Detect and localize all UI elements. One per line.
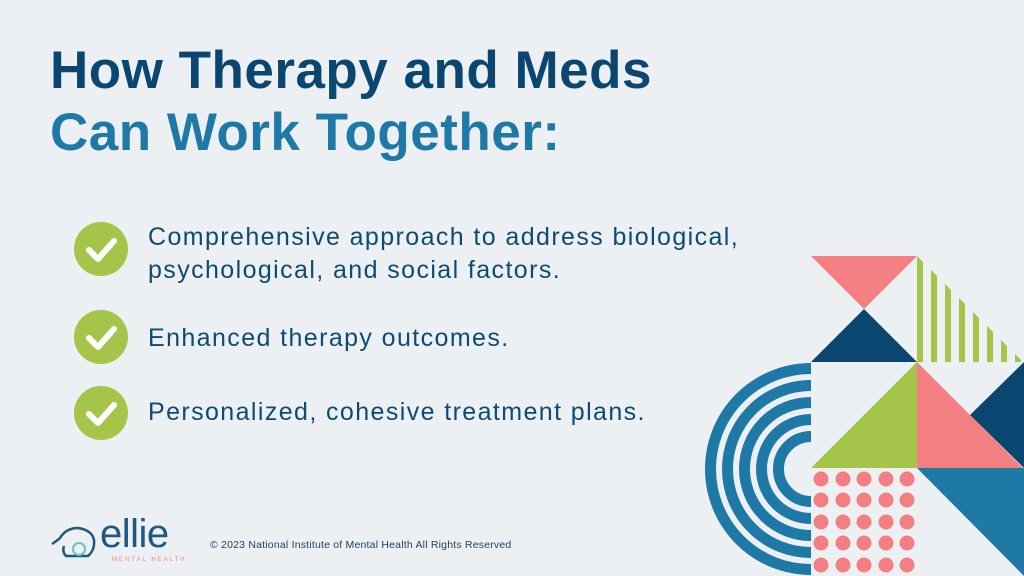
icon: elephant xyxy=(51,526,96,558)
title: How Therapy and Meds xyxy=(50,41,652,100)
item 3 xyxy=(74,386,646,440)
icon: check xyxy=(74,222,128,276)
item 2 xyxy=(74,310,510,364)
footer copyright: © 2023 National Institute of Mental Health All Rights Reserved xyxy=(210,539,511,551)
title: Can Work Together: xyxy=(50,103,561,162)
item 2: Enhanced therapy outcomes. xyxy=(148,324,510,352)
item 1: Comprehensive approach to address biological, xyxy=(148,223,739,251)
logo: MENTAL HEALTH xyxy=(112,557,187,563)
geometric art xyxy=(705,256,1024,576)
logo: ellie xyxy=(100,512,169,556)
logo xyxy=(51,512,187,563)
item 1: psychological, and social factors. xyxy=(148,256,561,284)
icon: check xyxy=(74,310,128,364)
icon: check xyxy=(74,386,128,440)
item 3: Personalized, cohesive treatment plans. xyxy=(148,398,646,426)
title xyxy=(50,41,652,162)
item 1 xyxy=(74,222,739,284)
